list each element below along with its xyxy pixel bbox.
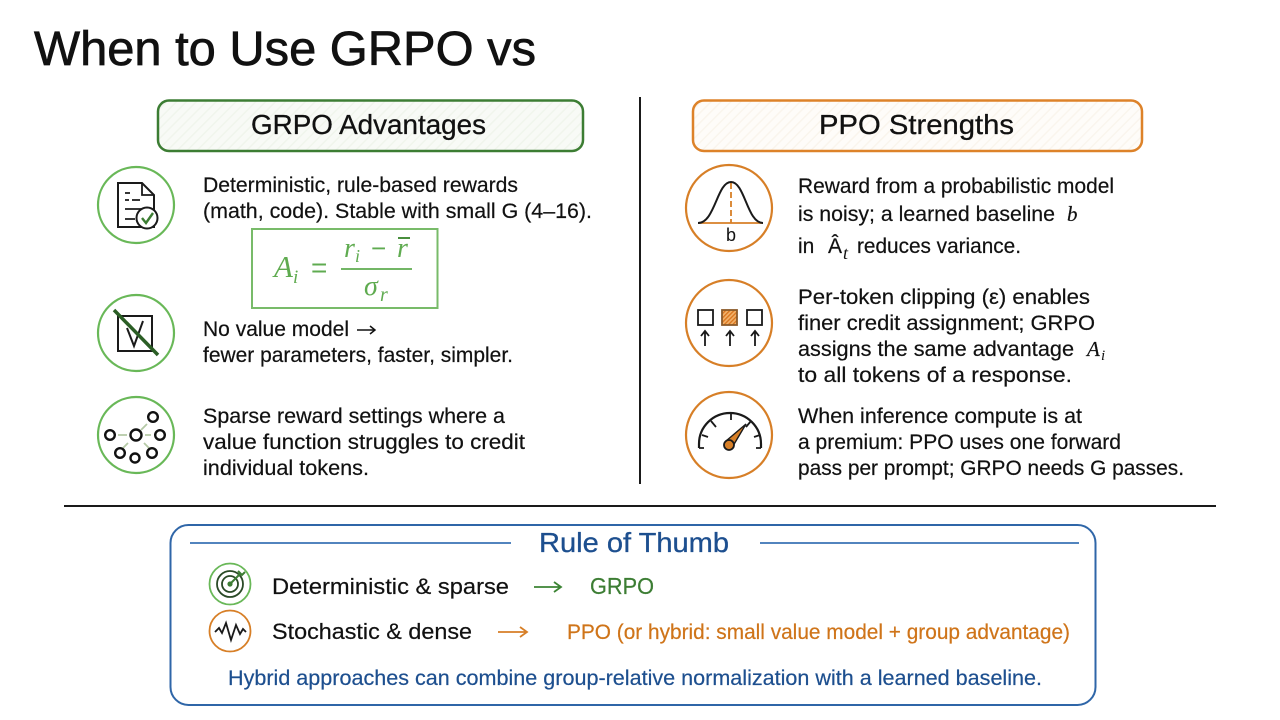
text: no value model: fewer parameters, faster, simpler. bbox=[203, 344, 513, 367]
text: deterministic rewards bbox=[203, 174, 592, 223]
icon: document with check bbox=[98, 167, 174, 243]
text: reward from probabilistic model: in bbox=[798, 235, 814, 258]
heading: PPO Strengths: PPO Strengths bbox=[819, 109, 1014, 140]
horizontal divider bbox=[64, 505, 1216, 507]
panel: PPO strengths bbox=[686, 100, 1184, 480]
text: per-token clipping: to all tokens of a response. bbox=[798, 364, 1072, 387]
text: reward from probabilistic model: is noisy; a learned baseline bbox=[798, 203, 1055, 226]
text: no value model bbox=[203, 318, 513, 367]
text: sparse reward settings: Sparse reward settings where a bbox=[203, 405, 505, 428]
row: stochastic and dense: PPO (or hybrid: small value model + group advantage) bbox=[567, 621, 1070, 644]
icon: bell curve with baseline b: b bbox=[726, 225, 736, 245]
text: per-token clipping: assigns the same advantage bbox=[798, 338, 1074, 361]
formula box: r bbox=[380, 284, 388, 306]
row: deterministic and sparse: Deterministic & sparse bbox=[272, 574, 509, 599]
text: inference compute: pass per prompt; GRPO needs G passes. bbox=[798, 457, 1184, 480]
panel: rule of thumb bbox=[170, 525, 1096, 705]
text: reward from probabilistic model: Â bbox=[828, 235, 842, 258]
formula box: i bbox=[355, 246, 360, 266]
text: inference compute: When inference compute is at bbox=[798, 405, 1082, 428]
text: per-token clipping bbox=[798, 286, 1105, 387]
icon: bell curve with baseline b bbox=[686, 165, 772, 251]
vertical divider bbox=[639, 97, 641, 484]
title: When to Use GRPO vs bbox=[34, 23, 536, 76]
text: inference compute: a premium: PPO uses one forward bbox=[798, 431, 1121, 454]
heading: GRPO Advantages: GRPO Advantages bbox=[251, 109, 486, 140]
text: deterministic rewards: (math, code). Stable with small G (4–16). bbox=[203, 200, 592, 223]
text: deterministic rewards: Deterministic, rule-based rewards bbox=[203, 174, 518, 197]
row: deterministic and sparse bbox=[272, 573, 654, 599]
text: inference compute bbox=[798, 405, 1184, 480]
text: per-token clipping: Per-token clipping (ε) enables bbox=[798, 286, 1090, 309]
formula box: r bbox=[344, 233, 355, 264]
row: stochastic and dense bbox=[272, 619, 1070, 644]
icon: crossed-out value box bbox=[98, 295, 174, 371]
text: no value model: No value model bbox=[203, 318, 349, 341]
heading: PPO Strengths bbox=[693, 100, 1142, 151]
icon: speedometer gauge bbox=[686, 392, 772, 478]
text: reward from probabilistic model: b bbox=[1067, 202, 1078, 226]
text: per-token clipping: A bbox=[1085, 337, 1100, 361]
formula box: A bbox=[272, 249, 294, 284]
text: hybrid approaches note: Hybrid approaches can combine group-relative normalization with a learned baseline. bbox=[228, 667, 1042, 690]
text: reward from probabilistic model: t bbox=[843, 243, 849, 263]
icon: noisy signal bbox=[210, 610, 250, 652]
formula box: i bbox=[293, 267, 298, 288]
heading: Rule of Thumb: Rule of Thumb bbox=[539, 527, 729, 558]
icon: target bbox=[210, 564, 250, 604]
text: sparse reward settings: individual tokens. bbox=[203, 457, 369, 480]
icon: sparse node network bbox=[98, 397, 174, 473]
panel: GRPO advantages bbox=[98, 100, 592, 480]
formula box bbox=[252, 229, 438, 308]
row: deterministic and sparse: GRPO bbox=[590, 573, 654, 599]
text: reward from probabilistic model: reduces variance. bbox=[857, 235, 1021, 258]
text: per-token clipping: i bbox=[1101, 348, 1105, 364]
heading: GRPO Advantages bbox=[158, 100, 583, 151]
text: sparse reward settings: value function struggles to credit bbox=[203, 431, 525, 454]
formula box: σ bbox=[364, 271, 379, 302]
text: reward from probabilistic model: Reward from a probabilistic model bbox=[798, 175, 1114, 198]
text: per-token clipping: finer credit assignment; GRPO bbox=[798, 312, 1095, 335]
formula box: − bbox=[371, 233, 386, 263]
icon: token boxes with arrows bbox=[686, 280, 772, 366]
text: reward from probabilistic model bbox=[798, 175, 1114, 263]
formula box: r bbox=[397, 233, 408, 264]
text: sparse reward settings bbox=[203, 405, 525, 480]
row: stochastic and dense: Stochastic & dense bbox=[272, 619, 472, 644]
formula box: = bbox=[311, 252, 327, 283]
